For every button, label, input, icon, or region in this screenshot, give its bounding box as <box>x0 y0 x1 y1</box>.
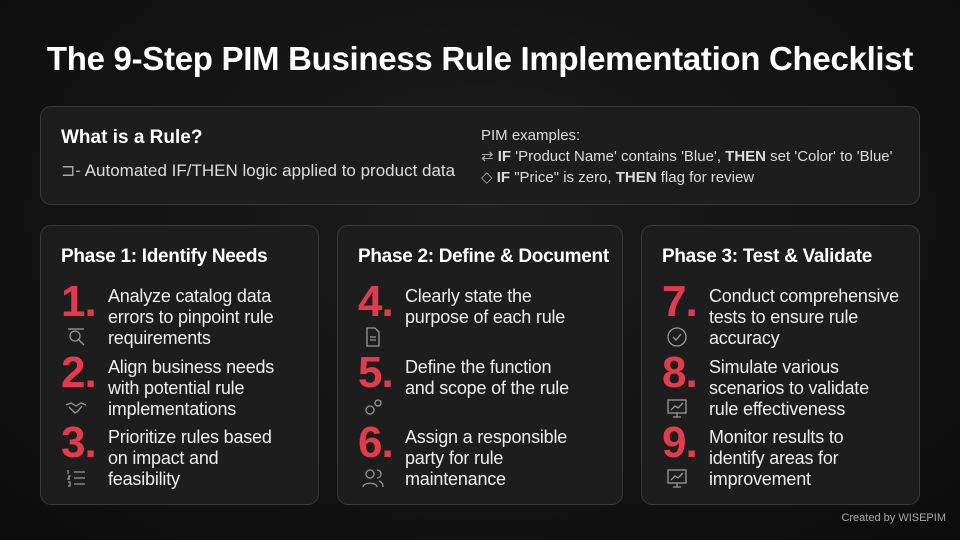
step 1: Analyze catalog data <box>108 286 271 306</box>
panel: phase 3 <box>641 225 920 505</box>
phase 1 heading: Phase 1: Identify Needs <box>61 246 267 267</box>
step 5 <box>358 348 569 415</box>
step 8 <box>662 348 869 419</box>
step 6: 6. <box>358 418 393 467</box>
step 8: Simulate various <box>709 357 839 377</box>
PIM examples: ⇄ IF 'Product Name' contains 'Blue', THEN set 'Color' to 'Blue' <box>481 148 893 165</box>
step 9: identify areas for <box>709 448 838 468</box>
step 3 <box>61 418 272 489</box>
step 6: maintenance <box>405 469 506 489</box>
step 9: 9. <box>662 418 697 467</box>
step 9 <box>662 418 843 489</box>
heading: what is a rule: What is a Rule? <box>61 127 202 148</box>
step 4: 4. <box>358 277 393 326</box>
panel: phase 2 <box>337 225 623 505</box>
step 6 <box>358 418 567 489</box>
step 3: on impact and <box>108 448 218 468</box>
PIM examples <box>481 127 893 186</box>
step 8: scenarios to validate <box>709 378 869 398</box>
step 4 <box>358 277 565 347</box>
PIM examples: PIM examples: <box>481 127 580 144</box>
step 2: with potential rule <box>108 378 244 398</box>
step 9: improvement <box>709 469 811 489</box>
step 4: purpose of each rule <box>405 307 565 327</box>
step 2: 2. <box>61 348 96 397</box>
step 2: implementations <box>108 399 236 419</box>
panel: what is a rule <box>40 106 920 205</box>
step 1 <box>61 277 274 348</box>
step 1: requirements <box>108 328 211 348</box>
step 7: 7. <box>662 277 697 326</box>
step 6: party for rule <box>405 448 503 468</box>
step 5: 5. <box>358 348 393 397</box>
step 2: Align business needs <box>108 357 274 377</box>
step 1: 1. <box>61 277 96 326</box>
step 5: Define the function <box>405 357 551 377</box>
step 1: errors to pinpoint rule <box>108 307 274 327</box>
footer credit: Created by WISEPIM <box>841 512 946 524</box>
step 7: Conduct comprehensive <box>709 286 899 306</box>
step 4: Clearly state the <box>405 286 532 306</box>
definition text: ⊐- Automated IF/THEN logic applied to product data <box>61 161 455 180</box>
step 9: Monitor results to <box>709 427 843 447</box>
PIM examples: ◇ IF "Price" is zero, THEN flag for review <box>481 169 754 186</box>
title: The 9-Step PIM Business Rule Implementation Checklist <box>47 40 913 77</box>
step 6: Assign a responsible <box>405 427 567 447</box>
step 3: 3. <box>61 418 96 467</box>
step 3: feasibility <box>108 469 180 489</box>
step 7: accuracy <box>709 328 779 348</box>
step 8: rule effectiveness <box>709 399 845 419</box>
phase 3 heading: Phase 3: Test & Validate <box>662 246 872 267</box>
step 7 <box>662 277 899 348</box>
phase 2 heading: Phase 2: Define & Document <box>358 246 609 267</box>
step 3: Prioritize rules based <box>108 427 272 447</box>
step 8: 8. <box>662 348 697 397</box>
step 2 <box>61 348 274 419</box>
step 5: and scope of the rule <box>405 378 569 398</box>
step 7: tests to ensure rule <box>709 307 858 327</box>
panel: phase 1 <box>40 225 319 505</box>
